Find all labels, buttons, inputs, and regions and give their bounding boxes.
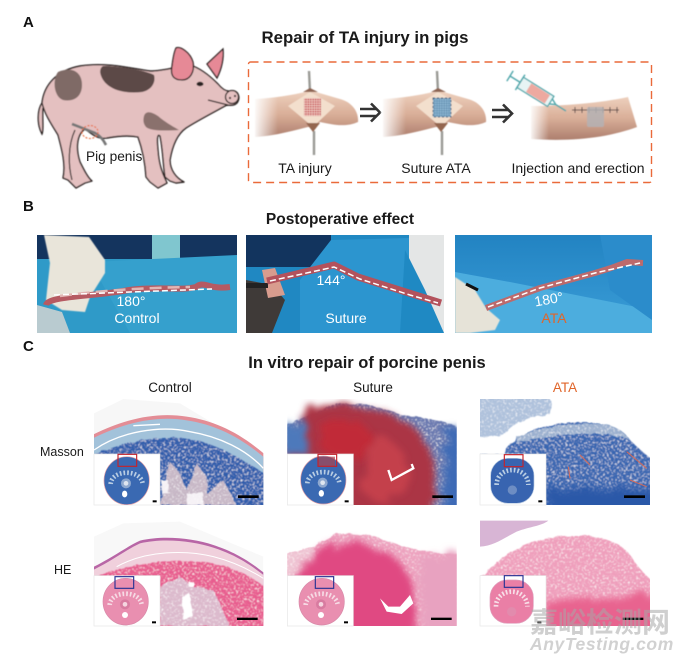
histology image grid [94, 399, 650, 626]
caption: TA injury: TA injury [278, 160, 332, 176]
watermark chinese: 嘉峪检测网 [530, 601, 670, 641]
panel A: pig and surgery workflow [23, 14, 652, 188]
panel letter A: A [23, 14, 34, 31]
photo: ATA [455, 235, 652, 333]
angle 180 ATA: 180° [533, 289, 564, 309]
column header ATA: ATA [553, 380, 577, 395]
label ATA: ATA [541, 310, 567, 326]
title: in vitro repair: In vitro repair of porcine penis [248, 354, 486, 372]
watermark latin: AnyTesting.com [529, 634, 674, 654]
HE control image [94, 538, 264, 626]
step: injection and erection illustration [505, 68, 637, 142]
syringe [505, 68, 571, 119]
title: repair of TA injury: Repair of TA injury in pigs [262, 28, 468, 47]
panel C: in vitro repair histology [23, 338, 663, 637]
panel letter C: C [23, 338, 34, 355]
panel letter B: B [23, 198, 34, 215]
panel B: postoperative effect [23, 198, 652, 333]
photo: suture [246, 235, 444, 333]
row label Masson: Masson [40, 445, 84, 459]
label control: Control [114, 310, 160, 326]
title: postoperative effect: Postoperative effect [266, 211, 414, 228]
Masson ATA image [480, 399, 650, 505]
photo: control [37, 235, 237, 333]
column header suture: Suture [353, 380, 393, 395]
step: suture ATA illustration [381, 71, 486, 155]
arrow [360, 104, 380, 122]
Masson suture inset [287, 454, 353, 505]
Masson control inset [94, 454, 160, 505]
label suture: Suture [325, 310, 367, 326]
Masson control image [94, 415, 264, 505]
Masson ATA inset [480, 454, 546, 505]
pig illustration [38, 48, 239, 188]
caption: injection and erection: Injection and erection [511, 160, 645, 176]
HE suture image [287, 532, 457, 626]
HE ATA inset [480, 576, 546, 626]
step: TA injury illustration [253, 71, 358, 155]
Masson suture image [287, 399, 457, 505]
dashed workflow box [248, 62, 652, 182]
watermark [529, 601, 674, 654]
arrow [492, 104, 512, 122]
HE suture inset [287, 576, 353, 626]
row label HE: HE [54, 563, 71, 577]
angle 144 suture: 144° [317, 272, 345, 288]
label: pig penis: Pig penis [86, 149, 142, 164]
column header control: Control [148, 380, 192, 395]
caption: suture ATA: Suture ATA [401, 160, 471, 176]
HE ATA image [480, 520, 650, 626]
HE control inset [94, 576, 160, 626]
angle 180 control: 180° [117, 293, 145, 309]
